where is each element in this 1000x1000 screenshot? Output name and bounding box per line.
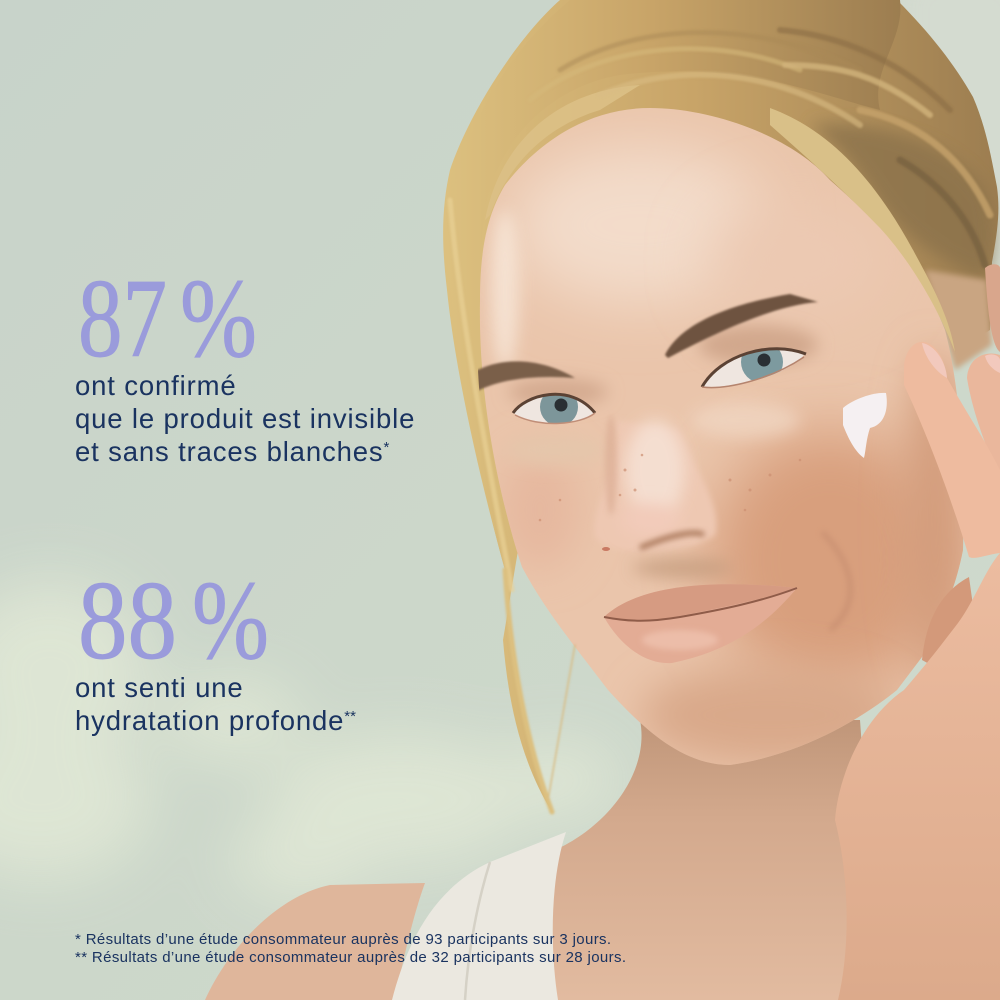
hair mass <box>443 0 998 812</box>
stat: 87 % <box>78 257 257 381</box>
nose <box>598 468 718 548</box>
right eye <box>702 341 806 388</box>
skin behind the temple strand <box>925 270 992 370</box>
stat: 88 %: 88 <box>78 559 177 683</box>
text: 88 % description: ont senti une <box>75 672 244 703</box>
soft clouds in the background <box>0 580 620 900</box>
ear <box>985 264 1000 352</box>
text: 87 % description: et sans traces blanches* <box>75 436 389 467</box>
lips <box>604 584 797 663</box>
footnotes: ** Résultats d’une étude consommateur auprès de 32 participants sur 28 jours. <box>75 949 626 966</box>
text: 87 % description: ont confirmé <box>75 370 237 401</box>
second finger <box>967 354 1000 480</box>
right eyebrow <box>665 294 818 358</box>
neck and chest <box>392 720 880 1000</box>
footnotes: * Résultats d’une étude consommateur auprès de 93 participants sur 3 jours. <box>75 931 611 948</box>
text: 88 % description <box>75 672 356 736</box>
left eyebrow <box>474 361 575 392</box>
under-eye brightness <box>690 402 800 438</box>
shoulder <box>205 883 425 1000</box>
text: 88 % description: hydratation profonde** <box>75 705 356 736</box>
eye socket shading <box>698 325 818 365</box>
stat: 88 %: % <box>192 559 269 683</box>
dark hair behind temple <box>810 124 993 280</box>
hair strand texture <box>450 30 990 812</box>
hand <box>835 553 1000 1000</box>
footnotes <box>75 931 626 966</box>
left eye <box>512 392 596 424</box>
index finger <box>904 342 1000 558</box>
stat: 87 %: % <box>180 257 257 381</box>
cream on cheek <box>843 393 887 458</box>
text: 87 % description <box>75 370 415 467</box>
smile line <box>832 555 850 627</box>
freckles <box>539 454 801 521</box>
text: 87 % description: que le produit est invisible <box>75 403 415 434</box>
stat: 88 % <box>78 559 269 683</box>
face <box>480 108 964 765</box>
stat: 87 %: 87 <box>78 257 167 381</box>
palm shadow <box>922 577 975 670</box>
hair front <box>447 0 955 570</box>
fingernails <box>922 343 1000 378</box>
white top <box>392 832 566 1000</box>
